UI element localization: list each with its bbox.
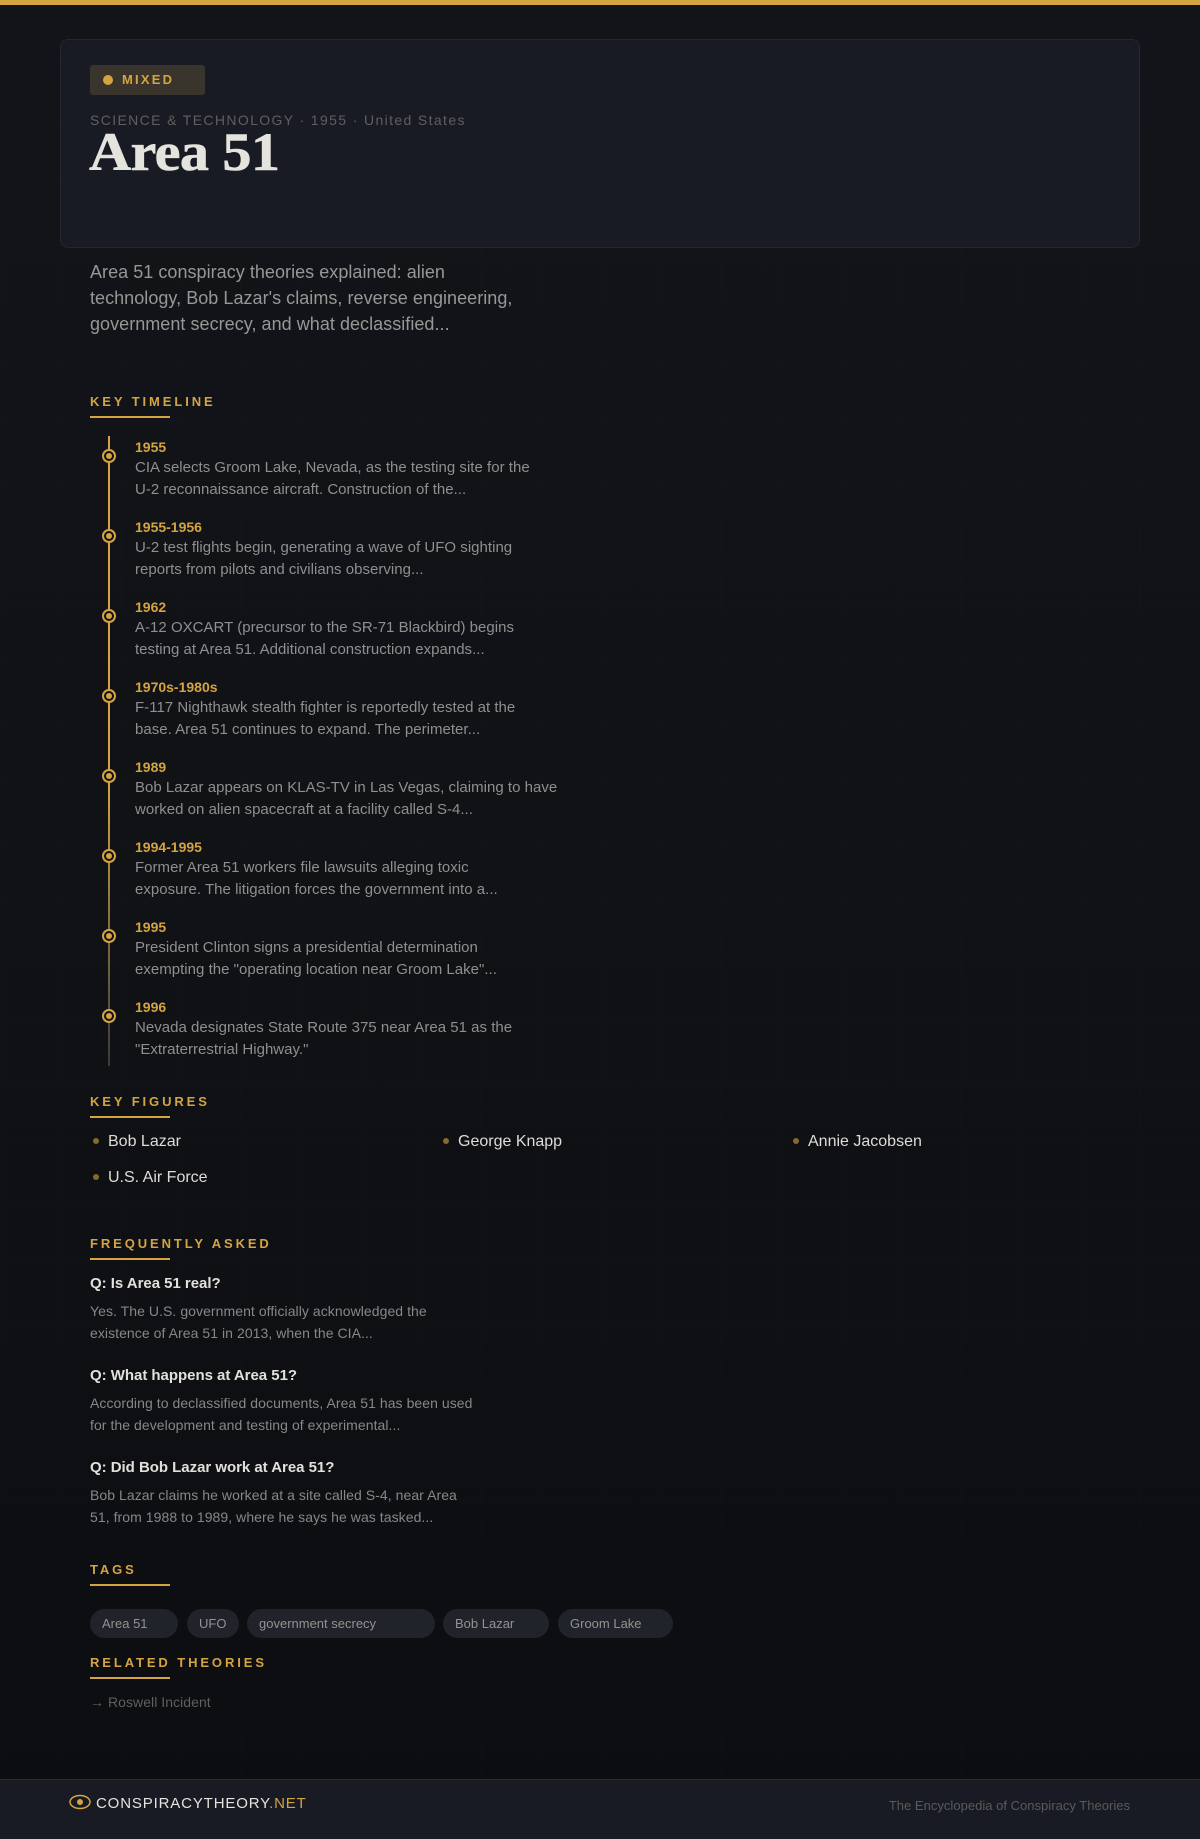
intro description: government secrecy, and what declassified... (90, 314, 450, 334)
intro description: Area 51 conspiracy theories explained: alien (90, 262, 445, 282)
timeline spine (108, 436, 110, 1066)
tag: UFO: UFO (199, 1616, 226, 1631)
timeline entry 1996 (135, 999, 512, 1058)
timeline entry 1970s-1980s (135, 679, 515, 738)
tag: UFO (187, 1609, 239, 1638)
title: Area 51 (89, 122, 279, 182)
faq: did Bob Lazar work at Area 51: Bob Lazar claims he worked at a site called S-4, near Area (90, 1487, 457, 1503)
timeline node 5 (102, 769, 116, 783)
heading: tags: TAGS (90, 1562, 137, 1577)
heading: key figures: KEY FIGURES (90, 1094, 210, 1109)
figure: Annie Jacobsen: Annie Jacobsen (808, 1133, 922, 1150)
badge label: MIXED (122, 72, 174, 87)
badge: mixed (90, 65, 205, 95)
faq: is Area 51 real: existence of Area 51 in 2013, when the CIA... (90, 1325, 373, 1341)
timeline entry 1996: 1996 (135, 999, 166, 1015)
top accent bar (0, 0, 1200, 5)
heading: frequently asked: FREQUENTLY ASKED (90, 1236, 272, 1251)
tag: Bob Lazar (443, 1609, 549, 1638)
tag: Groom Lake: Groom Lake (570, 1616, 642, 1631)
timeline entry 1955: 1955 (135, 439, 166, 455)
icon: eye logo (69, 1794, 91, 1810)
faq: what happens at Area 51: for the development and testing of experimental... (90, 1417, 400, 1433)
timeline entry 1962: 1962 (135, 599, 166, 615)
timeline entry 1989: Bob Lazar appears on KLAS-TV in Las Vegas, claiming to have (135, 779, 557, 796)
timeline entry 1955: CIA selects Groom Lake, Nevada, as the testing site for the (135, 459, 530, 476)
badge dot (103, 75, 113, 85)
timeline node 2 (102, 529, 116, 543)
panel: header card (60, 39, 1140, 248)
timeline entry 1994-1995: Former Area 51 workers file lawsuits alleging toxic (135, 859, 469, 876)
intro description (90, 262, 512, 334)
faq: did Bob Lazar work at Area 51: 51, from 1988 to 1989, where he says he was tasked... (90, 1509, 433, 1525)
timeline entry 1994-1995: 1994-1995 (135, 839, 202, 855)
tag: Area 51 (90, 1609, 178, 1638)
timeline entry 1995: exempting the "operating location near Groom Lake"... (135, 961, 497, 978)
timeline entry 1962 (135, 599, 514, 658)
figure: George Knapp: George Knapp (458, 1133, 562, 1150)
timeline entry 1970s-1980s: base. Area 51 continues to expand. The perimeter... (135, 721, 480, 738)
timeline entry 1955-1956: 1955-1956 (135, 519, 202, 535)
timeline entry 1996: "Extraterrestrial Highway." (135, 1041, 308, 1058)
timeline entry 1989: 1989 (135, 759, 166, 775)
timeline entry 1970s-1980s: 1970s-1980s (135, 679, 218, 695)
timeline entry 1962: A-12 OXCART (precursor to the SR-71 Blackbird) begins (135, 619, 514, 636)
timeline node 7 (102, 929, 116, 943)
timeline entry 1989 (135, 759, 557, 818)
faq: what happens at Area 51 (90, 1367, 472, 1433)
heading: key timeline: KEY TIMELINE (90, 394, 216, 409)
timeline entry 1995: 1995 (135, 919, 166, 935)
timeline entry 1995: President Clinton signs a presidential determination (135, 939, 478, 956)
timeline node 1 (102, 449, 116, 463)
footer logo wordmark: CONSPIRACYTHEORY.NET (96, 1795, 307, 1812)
timeline entry 1970s-1980s: F-117 Nighthawk stealth fighter is reportedly tested at the (135, 699, 515, 716)
timeline entry 1994-1995: exposure. The litigation forces the government into a... (135, 881, 498, 898)
timeline entry 1955 (135, 439, 530, 498)
timeline node 3 (102, 609, 116, 623)
timeline entry 1989: worked on alien spacecraft at a facility called S-4... (135, 801, 473, 818)
tag: government secrecy (247, 1609, 435, 1638)
tag: Bob Lazar: Bob Lazar (455, 1616, 514, 1631)
footer bar (0, 1779, 1200, 1839)
figure: Bob Lazar: Bob Lazar (108, 1133, 181, 1150)
timeline entry 1995 (135, 919, 497, 978)
faq: is Area 51 real: Q: Is Area 51 real? (90, 1275, 221, 1292)
faq: what happens at Area 51: Q: What happens at Area 51? (90, 1367, 297, 1384)
metadata line: SCIENCE & TECHNOLOGY · 1955 · United States (90, 112, 466, 128)
timeline entry 1955-1956: reports from pilots and civilians observing... (135, 561, 424, 578)
timeline entry 1996: Nevada designates State Route 375 near Area 51 as the (135, 1019, 512, 1036)
intro description: technology, Bob Lazar's claims, reverse engineering, (90, 288, 512, 308)
tag: government secrecy: government secrecy (259, 1616, 376, 1631)
faq: did Bob Lazar work at Area 51: Q: Did Bob Lazar work at Area 51? (90, 1459, 334, 1476)
tag: Groom Lake (558, 1609, 673, 1638)
faq: what happens at Area 51: According to declassified documents, Area 51 has been used (90, 1395, 472, 1411)
timeline entry 1955: U-2 reconnaissance aircraft. Construction of the... (135, 481, 466, 498)
related link: Roswell Incident: → Roswell Incident (90, 1694, 211, 1710)
timeline node 6 (102, 849, 116, 863)
timeline entry 1994-1995 (135, 839, 498, 898)
timeline node 8 (102, 1009, 116, 1023)
tag: Area 51: Area 51 (102, 1616, 148, 1631)
faq: is Area 51 real (90, 1275, 427, 1341)
timeline entry 1962: testing at Area 51. Additional construction expands... (135, 641, 485, 658)
timeline entry 1955-1956: U-2 test flights begin, generating a wave of UFO sighting (135, 539, 512, 556)
timeline entry 1955-1956 (135, 519, 512, 578)
timeline node 4 (102, 689, 116, 703)
footer tagline: The Encyclopedia of Conspiracy Theories (889, 1798, 1130, 1813)
faq: is Area 51 real: Yes. The U.S. government officially acknowledged the (90, 1303, 427, 1319)
faq: did Bob Lazar work at Area 51 (90, 1459, 457, 1525)
figure: U.S. Air Force: U.S. Air Force (108, 1169, 208, 1186)
heading: related theories: RELATED THEORIES (90, 1655, 267, 1670)
